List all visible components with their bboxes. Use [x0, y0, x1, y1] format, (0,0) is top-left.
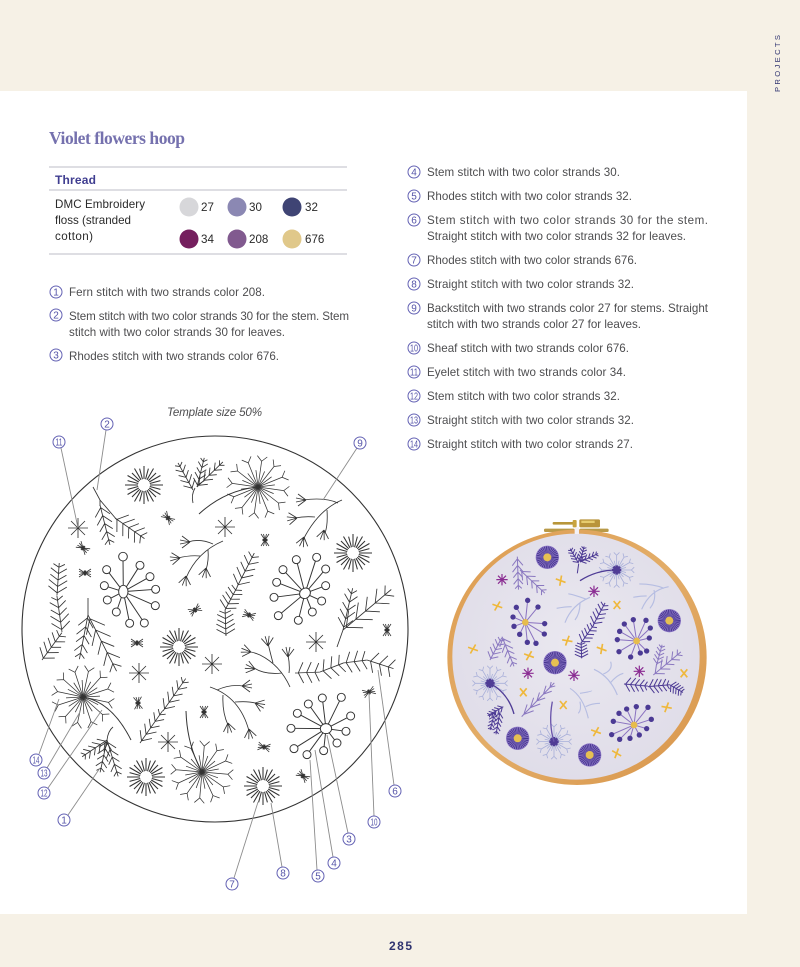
callout 1: [58, 768, 100, 826]
pale dandelion stitches: [472, 552, 634, 759]
callout 9: 9: [357, 438, 363, 450]
callout 7: 7: [229, 880, 235, 890]
step 9: [408, 302, 709, 331]
fabric: [452, 534, 700, 780]
swatch 676: 676: [305, 233, 324, 246]
swatch 30: [228, 198, 262, 216]
step 2: [50, 309, 349, 339]
callout 5: [310, 760, 324, 882]
step 10: Sheaf stitch with two strands color 676.: [427, 342, 629, 355]
callout 8: 8: [280, 868, 286, 880]
step 14: Straight stitch with two color strands 27.: [427, 438, 633, 451]
callout 14: 14: [32, 756, 40, 766]
title: Violet flowers hoop: [49, 128, 185, 148]
purple aster stitches: [506, 546, 681, 767]
step 6: 6: [411, 216, 417, 226]
swatch 27: [180, 198, 214, 216]
step 9: 9: [411, 304, 417, 314]
swatch 34: [180, 230, 214, 248]
step 4: Stem stitch with two color strands 30.: [427, 166, 620, 179]
template size caption: Template size 50%: [167, 406, 262, 419]
thread description: floss (stranded: [55, 214, 131, 227]
starburst stitches: [118, 459, 379, 812]
step 1: 1: [53, 288, 59, 298]
step 8: 8: [411, 280, 417, 290]
rhodes flower top right: [270, 553, 330, 624]
swatch 32: 32: [305, 201, 318, 214]
step 7: Rhodes stitch with two color strands 676.: [427, 254, 637, 267]
pale branch stitches: [557, 584, 669, 718]
step 3: 3: [53, 350, 59, 362]
swatch 676: [282, 230, 324, 248]
callout 12: [38, 710, 102, 800]
callout 11: 11: [56, 438, 63, 448]
step 2: stitch with two color strands 30 for leaves.: [69, 326, 285, 339]
step 6: Stem stitch with two color strands 30 for the stem.: [427, 214, 708, 227]
hoop outline: [22, 436, 408, 822]
eyelet stitches: [68, 517, 326, 752]
swatch 32: [282, 198, 318, 216]
step 3: Rhodes stitch with two strands color 676.: [69, 350, 279, 363]
template drawing: [22, 436, 408, 822]
swatch 30: 30: [249, 201, 262, 214]
step 5: 5: [411, 192, 417, 202]
dot flower stitches: [510, 598, 654, 742]
step 2: Stem stitch with two color strands 30 for the stem. Stem: [69, 310, 349, 323]
callout 8: [271, 803, 289, 880]
callout 7: [226, 802, 258, 890]
step 11: Eyelet stitch with two strands color 34.: [427, 366, 626, 379]
rhodes flower top left: [100, 552, 160, 627]
instructions left column: [50, 286, 349, 363]
swatch 34: 34: [201, 233, 214, 246]
thread description: [55, 198, 145, 243]
fern stitches: [35, 457, 398, 778]
white content panel: [0, 91, 747, 914]
magenta eyelet stitches: [496, 574, 645, 681]
rhodes flower bottom right: [287, 693, 355, 759]
step 9: stitch with two strands color 27 for leaves.: [427, 318, 641, 331]
step 11: 11: [410, 368, 418, 378]
callout 9: [323, 437, 366, 500]
wooden hoop: [447, 530, 707, 785]
table heading: thread: Thread: [55, 173, 96, 187]
instructions right column: [408, 166, 709, 451]
callout 1: 1: [61, 816, 67, 826]
hoop screw: [544, 519, 609, 532]
section tab: projects: PROJECTS: [773, 35, 782, 92]
sheaf stitches: [76, 511, 391, 783]
callout 5: 5: [315, 872, 321, 882]
yellow sheaf stitches: [468, 576, 687, 758]
callout 2: 2: [104, 420, 110, 430]
thread table: [49, 167, 347, 254]
callout 4: [315, 750, 340, 870]
callout 13: 13: [40, 768, 48, 780]
photo of finished embroidery hoop: [447, 519, 707, 785]
step 7: 7: [411, 256, 417, 266]
step 14: 14: [410, 440, 418, 450]
step 1: Fern stitch with two strands color 208.: [69, 286, 265, 299]
step 4: 4: [411, 168, 417, 178]
callout 13: [38, 712, 80, 780]
callout 10: 10: [370, 818, 378, 828]
step 6: Straight stitch with two color strands 32 for leaves.: [427, 230, 686, 243]
step 12: 12: [410, 392, 418, 402]
swatch 208: [228, 230, 268, 248]
swatch 208: 208: [249, 233, 268, 246]
thread description: cotton): [55, 230, 93, 243]
callout 2: [97, 418, 113, 490]
page number: 285: [389, 939, 412, 953]
callout 3: [327, 735, 355, 846]
swatch 27: 27: [201, 201, 214, 214]
step 6: [408, 214, 708, 243]
step 2: 2: [53, 310, 59, 322]
embroidered ferns: [485, 546, 686, 735]
callout 11: [53, 436, 78, 528]
dandelion stitches: [46, 452, 293, 806]
step 5: Rhodes stitch with two color strands 32.: [427, 190, 632, 203]
step 9: Backstitch with two strands color 27 for stems. Straight: [427, 302, 709, 315]
callouts: [30, 418, 401, 890]
callout 6: 6: [392, 786, 398, 798]
callout 4: 4: [331, 858, 337, 870]
forked stem stitches: [170, 494, 342, 740]
callout 12: 12: [40, 788, 48, 800]
callout 6: [378, 670, 401, 798]
step 8: Straight stitch with two color strands 32.: [427, 278, 634, 291]
thread description: DMC Embroidery: [55, 198, 145, 211]
step 10: 10: [410, 344, 418, 354]
callout 10: [368, 693, 380, 828]
callout 3: 3: [346, 834, 352, 846]
callout 14: [30, 699, 59, 766]
step 13: 13: [410, 416, 418, 426]
step 13: Straight stitch with two color strands 32.: [427, 414, 634, 427]
step 12: Stem stitch with two color strands 32.: [427, 390, 620, 403]
